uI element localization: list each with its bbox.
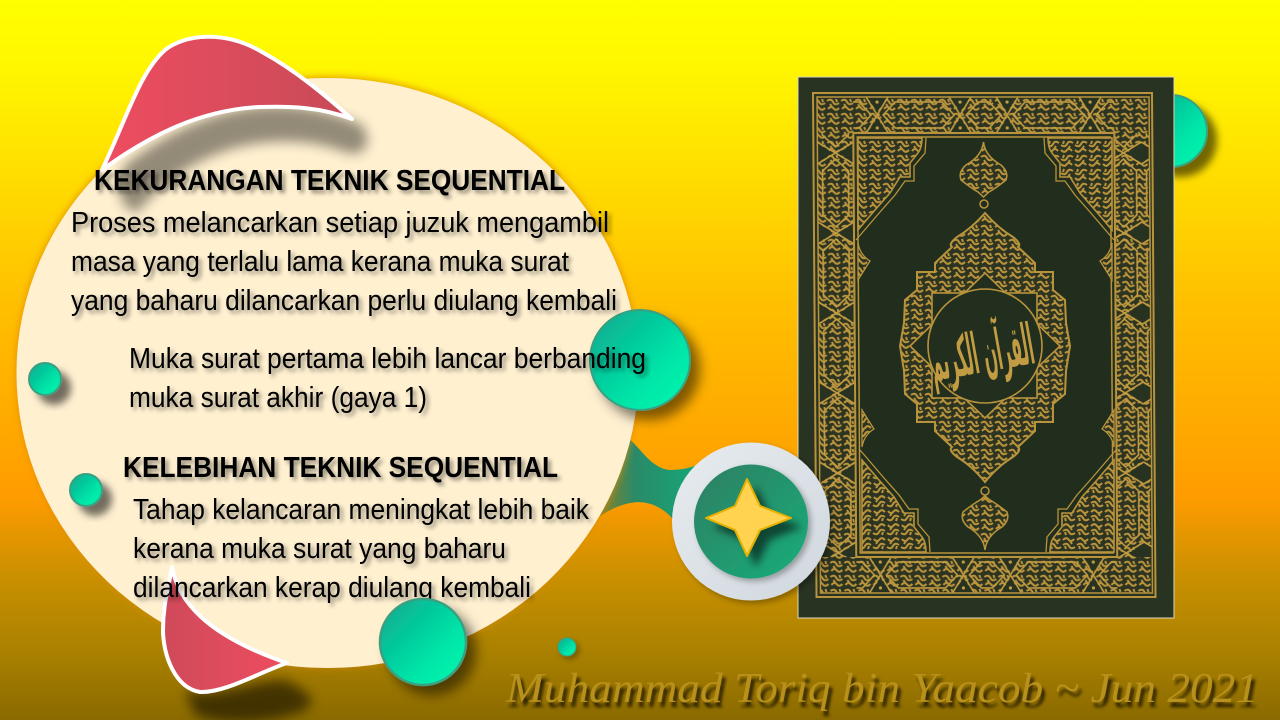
text block: kekurangan: Proses melancarkan setiap juzuk mengambil [71, 207, 609, 239]
text block: kelebihan [133, 494, 590, 604]
star badge [672, 442, 830, 600]
teal dot: left lower [70, 474, 102, 506]
teal dot: left upper [29, 363, 61, 395]
dark central field [856, 137, 1114, 555]
text block: kelebihan: Tahap kelancaran meningkat lebih baik [133, 494, 590, 526]
heading: kelebihan: KELEBIHAN TEKNIK SEQUENTIAL [123, 452, 558, 484]
teal dot: bottom small [558, 638, 576, 656]
text block: kekurangan: masa yang terlalu lama kerana muka surat [71, 246, 569, 278]
text block: muka surat [129, 343, 646, 414]
teal circle: bottom [380, 599, 466, 685]
book cover [798, 77, 1174, 618]
text block: kelebihan: kerana muka surat yang baharu [133, 533, 506, 565]
teal circle: right of panel [590, 310, 690, 410]
bottom red shape [163, 567, 311, 720]
corner ornaments [856, 138, 1116, 552]
text block: muka surat: Muka surat pertama lebih lancar berbanding [129, 343, 646, 375]
bottom finial [962, 487, 1008, 550]
calligraphy title: القرآن الكريم [924, 309, 1039, 395]
ornamental border band [813, 93, 1156, 597]
text block: muka surat: muka surat akhir (gaya 1) [129, 382, 427, 414]
author signature: Muhammad Toriq bin Yaacob ~ Jun 2021 [505, 666, 1258, 712]
central medallion [900, 213, 1070, 482]
connector between main circle and star badge [600, 436, 700, 530]
top red shape [102, 37, 367, 212]
top finial [960, 142, 1007, 208]
main cream circle [16, 78, 638, 668]
icon: four-point star [706, 479, 791, 556]
text block: kekurangan [71, 207, 617, 317]
text block: kelebihan: dilancarkan kerap diulang kembali [133, 572, 531, 604]
teal circle behind book [1135, 95, 1207, 167]
heading: kekurangan: KEKURANGAN TEKNIK SEQUENTIAL [94, 165, 565, 197]
text block: kekurangan: yang baharu dilancarkan perlu diulang kembali [71, 285, 617, 317]
